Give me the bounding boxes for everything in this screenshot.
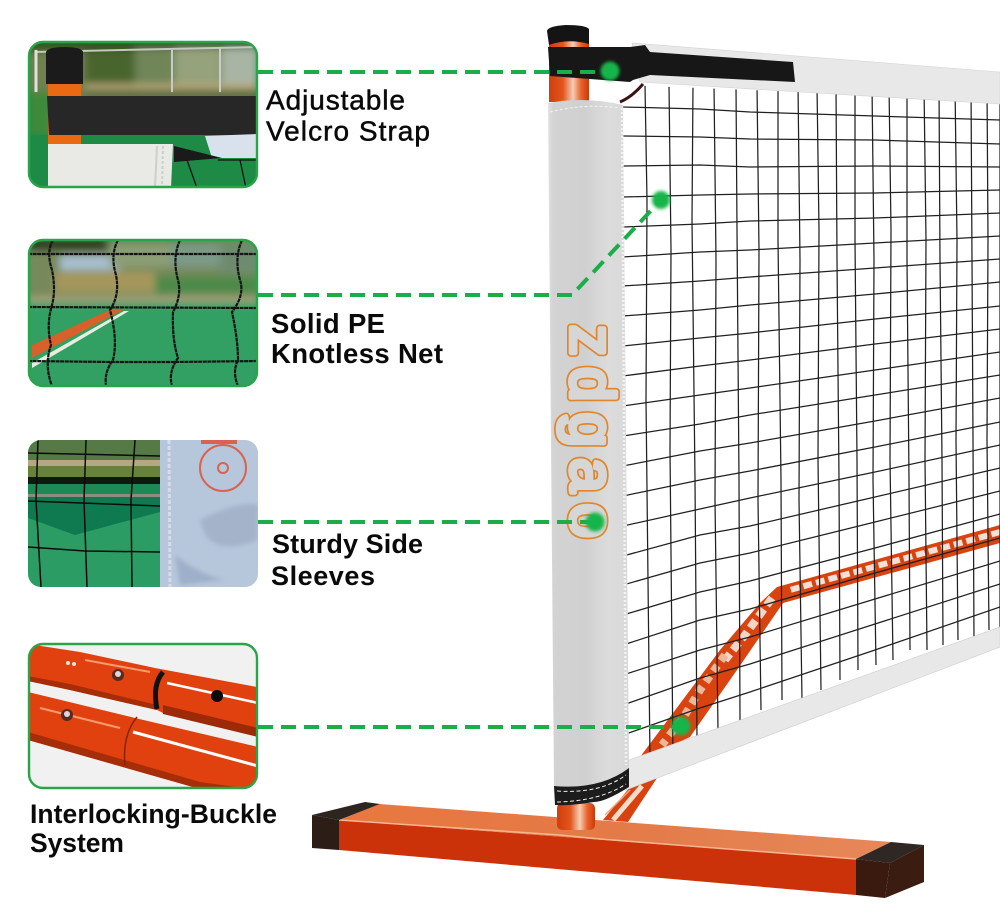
post: cap and orange tube [547,25,589,102]
brace: lower section below net band [603,778,657,822]
small dark cord from strap to sleeve [620,84,643,102]
leader: buckle system [258,716,690,736]
label: interlocking-buckle system: Interlocking-Buckle [30,799,277,829]
panel: velcro strap photo [28,41,258,188]
leader: side sleeves [258,512,604,532]
leader: velcro strap [258,62,620,80]
label: solid PE knotless net: Solid PE [271,308,385,339]
label: sturdy side sleeves [271,529,423,591]
velcro strap on post [548,45,795,82]
panel: knotless net photo [28,239,258,387]
base: orange foot bar with end caps [312,802,924,898]
label: adjustable velcro strap [266,84,430,146]
label: solid PE knotless net [271,308,443,369]
sleeve bottom collar [554,768,629,805]
side sleeve [548,100,629,787]
net bottom band [626,627,1000,790]
label: interlocking-buckle system: System [30,828,124,858]
lower post stub [557,803,595,830]
label: sturdy side sleeves: Sleeves [271,561,375,591]
logo on sleeve: zdgao [557,325,626,538]
net top band [632,43,1000,104]
label: sturdy side sleeves: Sturdy Side [272,529,423,559]
leader: knotless net [258,191,670,295]
logo on sleeve: zdgao [557,325,626,538]
label: solid PE knotless net: Knotless Net [271,338,443,369]
label: adjustable velcro strap: Velcro Strap [266,116,430,146]
label: interlocking-buckle system [30,799,277,858]
panel: side sleeve photo [28,440,258,587]
panel: interlocking buckle photo [28,643,258,789]
label: adjustable velcro strap: Adjustable [266,84,405,116]
brace: orange net support behind net [640,525,1000,780]
net mesh [623,85,1000,760]
